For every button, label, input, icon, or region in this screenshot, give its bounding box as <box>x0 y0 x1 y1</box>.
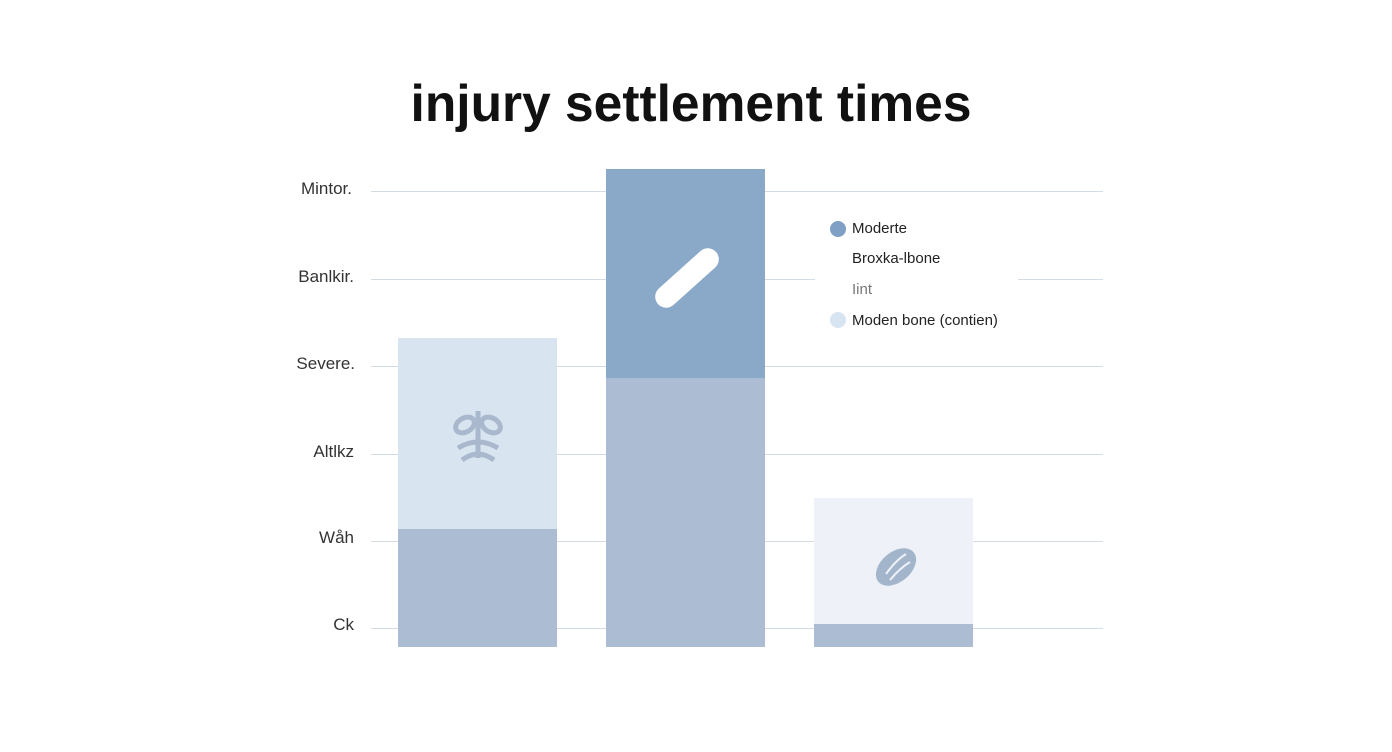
legend: Broxka-lbone <box>852 250 940 267</box>
legend: Iint <box>852 281 872 298</box>
icon: bone <box>876 548 916 586</box>
y-axis labels: Mintor. <box>301 179 352 198</box>
y-axis labels: Severe. <box>296 354 355 373</box>
bar 2 <box>606 169 765 647</box>
icon: bone/skeleton <box>453 411 503 462</box>
chart <box>296 169 1103 647</box>
y-axis labels: Altlkz <box>313 442 354 461</box>
legend: Moden bone (contien) <box>852 312 998 329</box>
bar 1 <box>398 338 557 647</box>
bar 3 <box>814 498 973 647</box>
y-axis labels: Wåh <box>319 528 354 547</box>
y-axis labels: Banlkir. <box>298 267 354 286</box>
legend <box>815 210 1018 335</box>
legend: Moderte <box>852 220 907 237</box>
icon: bandage <box>651 244 723 312</box>
y-axis labels <box>296 179 355 634</box>
y-axis labels: Ck <box>333 615 354 634</box>
title: injury settlement times <box>411 74 971 132</box>
